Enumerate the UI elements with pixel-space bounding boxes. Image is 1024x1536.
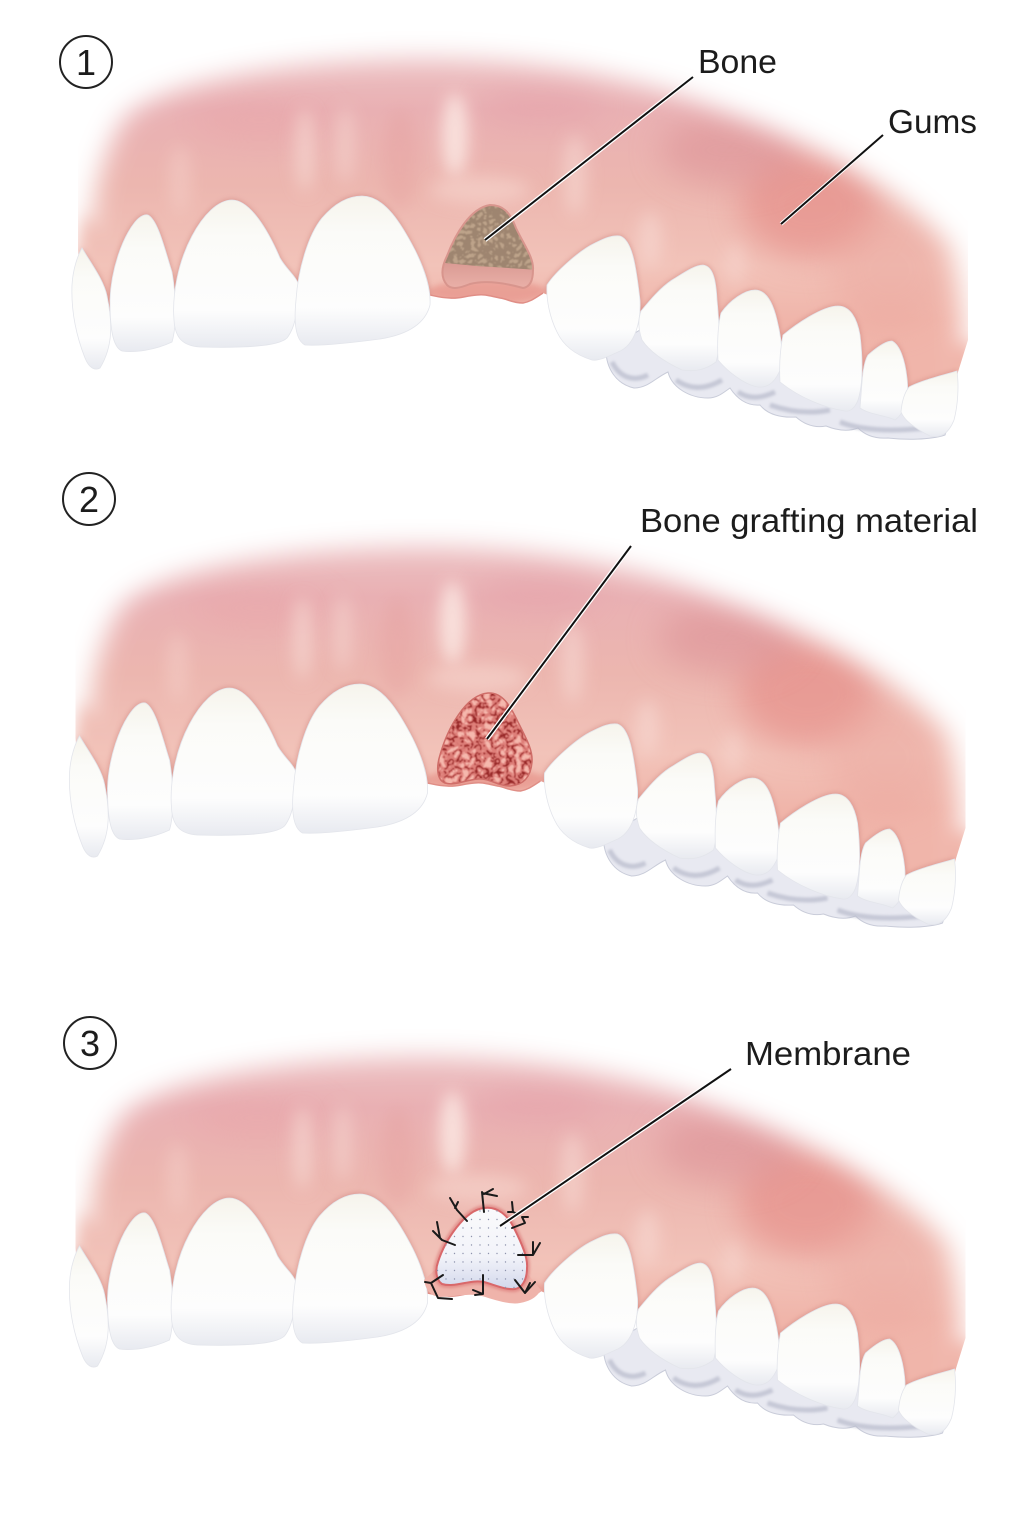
illustration: upper jaw with gums and teeth, step 2 xyxy=(28,488,998,1008)
label: Gums with leader line: Gums xyxy=(888,103,977,140)
gum patch beneath the membrane xyxy=(424,1265,541,1303)
label: Bone with leader line: Bone xyxy=(698,43,777,80)
step number 3 xyxy=(64,1017,116,1069)
step number 1: 1 xyxy=(76,42,96,83)
label: Membrane with leader line: Membrane xyxy=(745,1035,911,1072)
sutures around membrane xyxy=(425,1189,540,1299)
step number 2: 2 xyxy=(79,479,99,520)
illustration: upper jaw with gums and teeth, step 1 xyxy=(30,0,1000,520)
label: Bone grafting material with leader line: Bone grafting material xyxy=(640,502,978,539)
label: Bone with leader line xyxy=(485,43,777,240)
membrane with dotted surface xyxy=(436,1208,527,1289)
label: Membrane with leader line xyxy=(500,1035,911,1226)
step number 3: 3 xyxy=(80,1023,100,1064)
socket showing exposed bone xyxy=(442,204,534,289)
panel: step 3 membrane secured xyxy=(28,998,998,1518)
label: Gums with leader line xyxy=(781,103,977,224)
label: Bone grafting material with leader line xyxy=(487,502,978,739)
illustration: upper jaw with gums and teeth, step 3 xyxy=(28,998,998,1518)
panel: step 2 bone graft placed xyxy=(62,472,976,928)
socket filled with bone grafting material xyxy=(437,692,533,787)
panel: step 1 extraction socket xyxy=(59,35,976,440)
step number 1 xyxy=(60,36,112,88)
step number 2 xyxy=(63,473,115,525)
